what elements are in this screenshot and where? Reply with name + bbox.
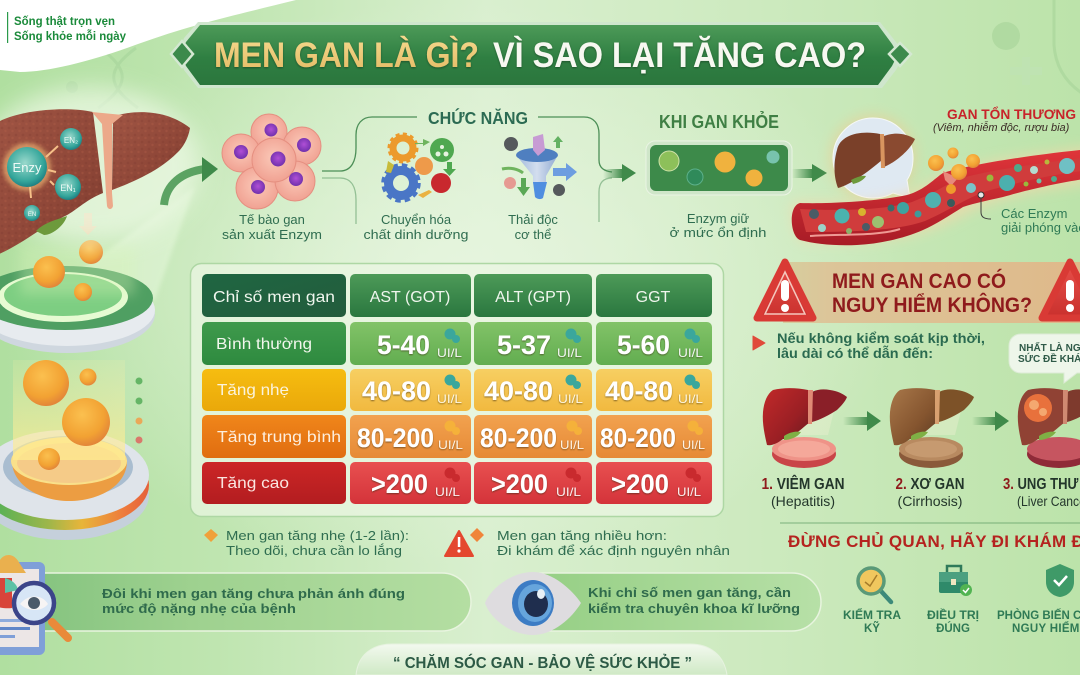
title text <box>214 35 866 75</box>
note: mild: Theo dõi, chưa cần lo lắng <box>226 543 402 558</box>
row: high increase: Tăng cao <box>217 475 289 492</box>
panel: specialist check: Khi chỉ số men gan tăng, cần <box>588 585 791 600</box>
row: mild increase: 40-80 <box>605 376 673 406</box>
caption: liver cells: sản xuất Enzym <box>222 227 322 242</box>
caption: stable enzymes: ở mức ổn định <box>670 225 766 240</box>
label: check: KIỂM TRA <box>843 609 901 622</box>
row: normal: 5-60 <box>617 330 670 360</box>
note: mild <box>204 528 409 558</box>
enzyme bubbles: EN₁ <box>60 183 76 193</box>
illustration: upper platform with orange enzymes <box>0 213 155 353</box>
row: high increase: UI/L <box>556 485 581 499</box>
text: consequences intro: Nếu không kiểm soát kịp thời, <box>777 331 985 346</box>
heading: danger: NGUY HIỂM KHÔNG? <box>832 293 1032 317</box>
caption: metabolism <box>364 212 468 242</box>
illustration: liver cells <box>222 114 321 209</box>
panel: enzyme table <box>190 264 724 516</box>
table header row: ALT (GPT) <box>495 289 571 306</box>
illustration: liver with enzymes <box>0 87 200 258</box>
panel: specialist check: kiểm tra chuyên khoa kĩ lưỡng <box>588 601 800 616</box>
panel: stable enzymes <box>646 141 792 195</box>
icon: check magnifier <box>858 568 891 602</box>
logo slogan: Sống khỏe mỗi ngày <box>14 28 126 43</box>
function connector lines <box>322 117 612 224</box>
row: mild increase: Tăng nhẹ <box>217 382 289 399</box>
note: higher: Đi khám để xác định nguyên nhân <box>497 543 730 558</box>
icon: warning right <box>1042 262 1080 318</box>
table header row: GGT <box>636 289 671 306</box>
row: normal: Bình thường <box>216 336 312 353</box>
illustration: cancer liver <box>1018 388 1080 468</box>
logo slogan: Sống thật trọn vẹn <box>14 14 115 28</box>
light beam <box>40 186 195 300</box>
row: moderate increase: UI/L <box>560 438 584 452</box>
table header row <box>202 274 712 317</box>
row: high increase: UI/L <box>435 485 460 499</box>
arrow: cirrhosis to cancer <box>972 411 1009 431</box>
illustration: hepatitis liver <box>763 388 847 468</box>
enzyme bubbles <box>3 128 82 221</box>
label: check: KỸ <box>864 622 880 635</box>
label: treatment: ĐÚNG <box>936 622 970 635</box>
logo slogan <box>14 14 126 43</box>
row: normal: 5-40 <box>377 330 430 360</box>
row: moderate increase: UI/L <box>682 438 705 452</box>
row: high increase: >200 <box>611 469 669 499</box>
caption: metabolism: chất dinh dưỡng <box>364 227 468 242</box>
panel: note not reflecting severity: Đôi khi men gan tăng chưa phản ánh đúng <box>102 586 405 601</box>
heading: damaged liver: (Viêm, nhiễm độc, rượu bia) <box>933 121 1070 134</box>
icon: detox funnel <box>502 134 577 199</box>
label: prevention <box>997 609 1080 635</box>
caption: stable enzymes <box>670 211 766 240</box>
label: hepatitis <box>762 474 844 509</box>
icon: warning left <box>757 262 813 318</box>
note: higher <box>445 528 730 558</box>
icon: shield <box>1046 564 1074 597</box>
row: moderate increase: Tăng trung bình <box>217 429 341 446</box>
table header row: AST (GOT) <box>370 289 450 306</box>
heading: damaged liver: GAN TỔN THƯƠNG <box>947 105 1076 122</box>
caption: detox <box>508 212 558 242</box>
enzyme bubbles: Enzy <box>13 160 42 175</box>
row: normal: UI/L <box>437 346 462 360</box>
note: enzymes released <box>978 192 1080 235</box>
table header row: Chỉ số men gan <box>213 289 335 306</box>
row: mild increase: UI/L <box>678 392 703 406</box>
label: treatment <box>927 609 979 635</box>
panel: specialist check <box>540 573 821 631</box>
panel: note not reflecting severity <box>40 573 471 631</box>
note: higher: Men gan tăng nhiều hơn: <box>497 528 667 543</box>
caption: liver cells <box>222 212 322 242</box>
row: high increase <box>202 462 712 504</box>
caption: detox: cơ thể <box>515 227 551 242</box>
caption: liver cells: Tế bào gan <box>239 212 305 227</box>
footer quote <box>356 644 727 675</box>
heading: danger: MEN GAN CAO CÓ <box>832 269 1006 293</box>
leaked enzymes <box>928 148 980 180</box>
illustration: lower platform with orange enzymes <box>0 360 149 540</box>
row: mild increase: UI/L <box>558 392 583 406</box>
logo swoosh <box>0 0 296 72</box>
heading: healthy liver: KHI GAN KHỎE <box>659 111 779 132</box>
label: prevention: NGUY HIỂM <box>1012 622 1080 635</box>
illustration: cirrhosis liver <box>890 388 974 468</box>
text: consequences intro: lâu dài có thể dẫn đến: <box>777 346 933 361</box>
note: enzymes released: Các Enzym <box>1001 206 1067 221</box>
text: consequences intro <box>753 331 985 361</box>
label: hepatitis: 1. VIÊM GAN <box>762 474 844 493</box>
title banner <box>171 22 911 88</box>
row: normal: UI/L <box>557 346 582 360</box>
title text: VÌ SAO LẠI TĂNG CAO? <box>493 35 866 75</box>
note: mild: Men gan tăng nhẹ (1-2 lần): <box>226 528 409 543</box>
label: treatment: ĐIỀU TRỊ <box>927 609 979 622</box>
label: hepatitis: (Hepatitis) <box>771 493 835 509</box>
row: mild increase: 40-80 <box>484 376 553 406</box>
row: mild increase: UI/L <box>437 392 462 406</box>
arrow: hepatitis to cirrhosis <box>843 411 881 431</box>
row: mild increase <box>202 369 712 411</box>
label: cirrhosis: (Cirrhosis) <box>898 493 962 509</box>
row: mild increase: 40-80 <box>362 376 431 406</box>
row: moderate increase: 80-200 <box>480 423 557 453</box>
caption: metabolism: Chuyển hóa <box>381 212 452 227</box>
row: normal <box>202 322 712 365</box>
label: liver cancer <box>1003 476 1080 509</box>
footer quote: “ CHĂM SÓC GAN - BẢO VỆ SỨC KHỎE ” <box>393 653 692 672</box>
row: moderate increase: 80-200 <box>600 423 676 453</box>
heading: danger <box>757 262 1080 323</box>
heading: damaged liver <box>933 105 1076 134</box>
title text: MEN GAN LÀ GÌ? <box>214 35 479 75</box>
enzyme bubbles: EN₂ <box>64 136 78 145</box>
divider <box>780 522 1080 524</box>
enzyme bubbles: EN <box>28 212 36 218</box>
icon: clipboard with magnifier <box>0 555 68 655</box>
label: check <box>843 609 901 635</box>
row: normal: UI/L <box>678 346 703 360</box>
row: high increase: >200 <box>491 469 548 499</box>
label: cirrhosis: 2. XƠ GAN <box>896 476 964 493</box>
caption: detox: Thải độc <box>508 212 558 227</box>
heading: function: CHỨC NĂNG <box>428 107 528 128</box>
illustration: blood vessel <box>792 146 1080 245</box>
callout: at-risk note <box>1009 334 1080 383</box>
row: high increase: >200 <box>371 469 428 499</box>
row: high increase: UI/L <box>677 485 701 499</box>
arrow: liver to cells <box>164 157 218 205</box>
caption: stable enzymes: Enzym giữ <box>687 211 749 226</box>
icon: treatment case <box>939 566 972 596</box>
arrow: to healthy liver <box>603 164 636 182</box>
row: moderate increase <box>202 415 712 458</box>
label: cirrhosis <box>896 476 964 509</box>
row: moderate increase: UI/L <box>438 438 463 452</box>
row: normal: 5-37 <box>497 330 551 360</box>
panel: note not reflecting severity: mức độ nặng nhẹ của bệnh <box>102 601 296 616</box>
icon: metabolism gears <box>383 134 456 201</box>
callout: damaged liver <box>829 114 917 202</box>
icon: eye <box>485 572 581 635</box>
arrow: to damaged liver <box>792 164 827 182</box>
row: moderate increase: 80-200 <box>357 423 434 453</box>
